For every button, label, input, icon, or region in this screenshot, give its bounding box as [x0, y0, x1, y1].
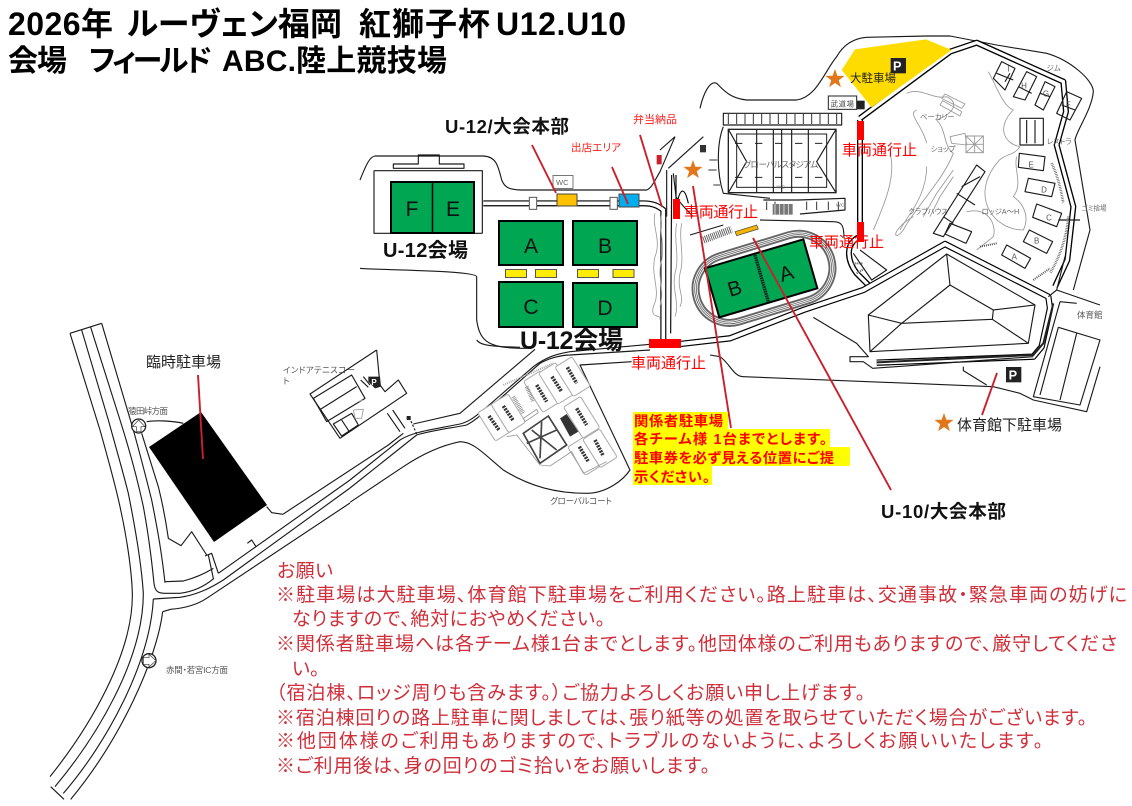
- notes text block: ※宿泊棟回りの路上駐車に関しましては、張り紙等の処置を取らせていただく場合がございます。: [276, 706, 1087, 729]
- callout: staff parking: 駐車券を必ず見える位置にご提: [634, 449, 835, 467]
- leader: lunch delivery: [640, 135, 662, 207]
- road map: U-12 grounds surroundings: [360, 137, 688, 348]
- label: shop area: 出店エリア: [571, 142, 621, 154]
- field C: C: [523, 296, 539, 319]
- road closure labels: 車両通行止: [842, 142, 917, 159]
- field A: [499, 221, 563, 265]
- leader: U-12 HQ: [532, 145, 556, 193]
- road map: stadium and park: B: [1034, 236, 1039, 245]
- title: 陸上競技場: [296, 45, 447, 78]
- road closure labels: 車両通行止: [631, 355, 706, 372]
- notes text block: い。: [292, 659, 319, 680]
- notes text block: お願い: [277, 561, 333, 582]
- label: global court: グローバルコート: [550, 496, 612, 506]
- road closure bars: [649, 121, 864, 348]
- notes text block: ※他団体様のご利用もありますので、トラブルのないように、よろしくお願いいたします。: [276, 729, 1043, 752]
- athletics track: [685, 223, 843, 333]
- hill outline: [700, 36, 1093, 290]
- pitch B and A: B: [725, 276, 745, 302]
- road map: junction: [153, 480, 350, 612]
- hedge lines: [653, 213, 682, 320]
- title: 2026年: [8, 6, 113, 42]
- stadium: WC: [777, 184, 785, 190]
- label: gym parking: 体育館下駐車場: [957, 417, 1062, 434]
- notes text block: ※関係者駐車場へは各チーム様1台までとします。他団体様のご利用もありますので、厳守してくださ: [276, 633, 1117, 655]
- field B: [573, 221, 637, 265]
- title: ルーヴェン福岡: [127, 6, 342, 42]
- WC box: WC: [556, 178, 569, 187]
- gym roof: [868, 254, 1035, 352]
- field F / E: [391, 182, 474, 233]
- field F / E: F: [406, 198, 418, 221]
- callout: staff parking: [633, 412, 850, 486]
- label: north direction: 猿田峠方面: [128, 406, 168, 416]
- label: south direction: 赤間・若宮IC方面: [166, 665, 228, 675]
- label: gym: 体育館: [1077, 310, 1103, 320]
- label: main parking: 大駐車場: [850, 71, 896, 85]
- road closure labels: 車両通行止: [684, 204, 758, 221]
- field B: B: [598, 235, 612, 258]
- road map: stadium and park: クラブハウス: [908, 207, 948, 216]
- notes text block: なりますので、絶対におやめください。: [292, 608, 605, 630]
- icon: south exit arrow: [142, 654, 156, 668]
- stadium: WC: [836, 203, 845, 209]
- icon: main parking P: [891, 58, 906, 74]
- road map: stadium and park: H: [1021, 82, 1027, 91]
- shop area tent: [619, 194, 639, 207]
- pitch B and A: A: [776, 261, 797, 287]
- road map: stadium and park: レストラ: [1047, 137, 1072, 146]
- star: staff parking: [683, 160, 703, 178]
- title: ABC.: [222, 45, 296, 78]
- road map: gym and south parking: [680, 244, 1100, 412]
- icon: gym parking P: P: [1009, 368, 1018, 382]
- label: indoor tennis court: インドアテニスコー: [283, 365, 355, 375]
- tennis court building: [310, 350, 407, 438]
- notes text block: （宿泊棟、ロッジ周りも含みます。）ご協力よろしくお願い申し上げます。: [276, 682, 865, 704]
- leader: U-10 HQ: [753, 238, 891, 490]
- callout: staff parking: 関係者駐車場: [634, 412, 723, 430]
- road closure labels: [631, 142, 917, 372]
- label: indoor tennis court: [283, 365, 355, 386]
- notes text block: ※駐車場は大駐車場、体育館下駐車場をご利用ください。路上駐車は、交通事故・緊急車両の妨げに: [276, 584, 1127, 606]
- title: [8, 6, 626, 78]
- road map: stadium and park: D: [1041, 186, 1047, 195]
- martial arts hall: 武道場: [831, 100, 855, 109]
- leader: temporary parking: [198, 375, 203, 459]
- field C: [499, 282, 563, 327]
- stadium: [708, 113, 845, 215]
- notes text block: ※ご利用後は、身の回りのゴミ拾いをお願いします。: [276, 755, 710, 777]
- field F / E: E: [446, 198, 460, 221]
- title: 会場: [8, 45, 67, 78]
- icon: gym parking P: [1006, 367, 1021, 382]
- road map: west highway: [50, 323, 207, 799]
- label: U-12 venue south: U-12会場: [520, 327, 623, 355]
- U-12 access road: [483, 203, 663, 340]
- road map: stadium and park: ショップ: [931, 145, 956, 154]
- label: U-12 HQ: U-12/大会本部: [445, 116, 569, 137]
- icon: north exit arrow: [132, 419, 146, 433]
- park paths and buildings: [853, 62, 1082, 280]
- pitch B and A: [705, 239, 817, 317]
- U-10 HQ tent: [735, 225, 758, 236]
- star: gym parking: [934, 413, 954, 431]
- road map: central road and tennis courts: [283, 340, 650, 514]
- field D: [573, 283, 637, 327]
- label: U-10 HQ: U-10/大会本部: [881, 501, 1006, 522]
- road map: stadium and park: ロッジA～H: [982, 207, 1019, 216]
- label: U-12 venue west: U-12会場: [383, 239, 468, 262]
- temporary parking label: 臨時駐車場: [146, 354, 221, 371]
- icon: tennis parking P: P: [371, 378, 377, 387]
- icon: main parking P: P: [893, 60, 902, 74]
- road map: stadium and park: F: [1066, 100, 1071, 109]
- road map: stadium and park: C: [1046, 214, 1052, 223]
- road map: stadium and park: [660, 36, 1107, 333]
- leader: gym parking: [982, 373, 997, 415]
- stadium: グローバルスタジアム: [743, 159, 819, 170]
- road map: stadium and park: I: [1007, 65, 1009, 74]
- WC box: [553, 176, 573, 188]
- road map: stadium and park: A: [1012, 252, 1018, 261]
- star: main parking: [825, 69, 845, 87]
- notes text block: [276, 561, 1127, 777]
- label: indoor tennis court: ト: [283, 376, 290, 386]
- U-12 HQ tent: [557, 194, 577, 206]
- road map: stadium and park: ベーカリー: [920, 112, 955, 121]
- main parking lot: [842, 39, 952, 107]
- label: lunch delivery: 弁当納品: [633, 112, 677, 126]
- road map: stadium and park: ゴミ捨場: [1081, 204, 1107, 213]
- callout: staff parking: 示ください。: [634, 469, 710, 486]
- field A: A: [524, 235, 538, 258]
- leader: shop area: [612, 167, 628, 204]
- yellow benches: [506, 270, 634, 278]
- global court buildings: [478, 357, 617, 475]
- leader: staff parking: [693, 186, 731, 428]
- road map: stadium and park: E: [1028, 160, 1034, 169]
- loop road: [860, 43, 1073, 287]
- icon: tennis parking P: [368, 377, 381, 388]
- temporary parking block: [149, 412, 267, 542]
- field D: D: [597, 297, 613, 320]
- title: 紅獅子杯: [359, 6, 490, 42]
- road map: stadium and park: G: [1043, 90, 1049, 99]
- road closure labels: 車両通行止: [809, 234, 884, 251]
- road map: stadium and park: ジム: [1047, 64, 1061, 73]
- title: フィールド: [89, 45, 212, 78]
- title: U12.U10: [496, 6, 626, 42]
- callout: staff parking: 各チーム様 1台までとします。: [634, 430, 827, 448]
- martial arts hall: [828, 96, 865, 109]
